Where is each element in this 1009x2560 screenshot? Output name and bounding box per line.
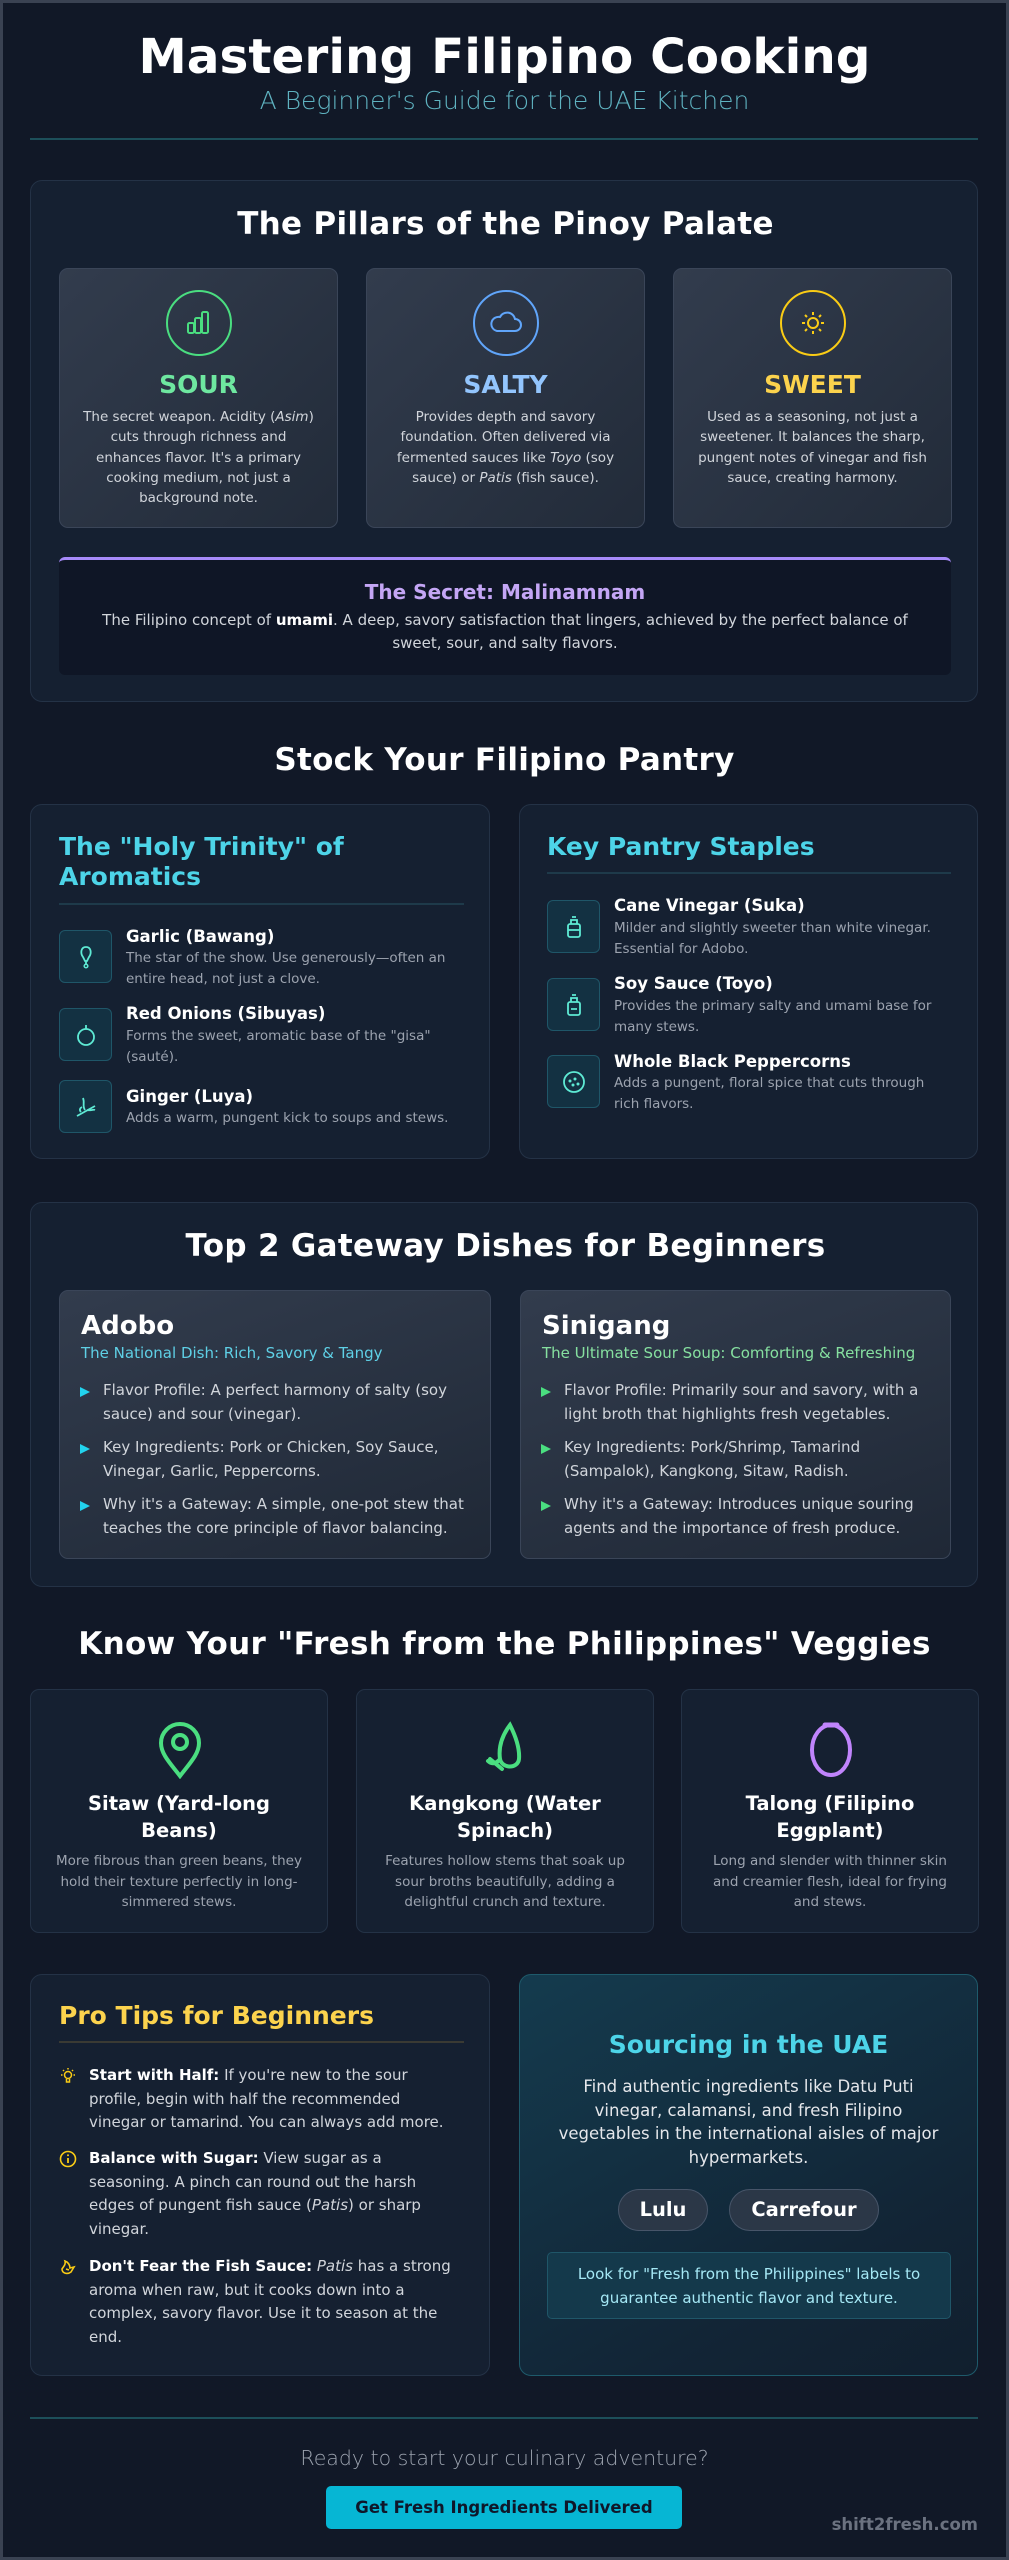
card: sinigang: Why it's a Gateway: Introduces unique souring <box>564 1495 914 1513</box>
card: talong: Long and slender with thinner skin <box>713 1853 947 1869</box>
card: kangkong <box>356 1689 654 1933</box>
item: onion: Forms the sweet, aromatic base of the "gisa" <box>126 1028 431 1044</box>
card: sour: cooking medium, not just a <box>106 470 291 486</box>
pill: carrefour <box>729 2189 879 2231</box>
heading: pantry: Stock Your Filipino Pantry <box>274 742 735 778</box>
card: salty <box>366 268 645 528</box>
card: sour: The secret weapon. Acidity (Asim) <box>83 409 314 425</box>
tip: balance with sugar <box>60 2149 421 2238</box>
card: adobo: sauce) and sour (vinegar). <box>103 1404 301 1422</box>
card: sinigang: agents and the importance of fresh produce. <box>564 1518 900 1536</box>
panel: aromatics <box>30 804 490 1159</box>
card: adobo: Key Ingredients: Pork or Chicken, Soy Sauce, <box>103 1438 438 1456</box>
callout: label note <box>547 2252 951 2319</box>
card: talong: Talong (Filipino <box>746 1792 914 1815</box>
tip: fish sauce: end. <box>89 2328 122 2346</box>
item: vinegar: Cane Vinegar (Suka) <box>614 896 805 915</box>
icon: leaf <box>486 1721 522 1772</box>
pill: lulu <box>618 2189 708 2231</box>
card: sour: enhances flavor. It's a primary <box>96 450 301 466</box>
tip: start with half: profile, begin with half the recommended <box>89 2090 400 2108</box>
card: kangkong: delightful crunch and texture. <box>404 1894 606 1910</box>
card: adobo: Why it's a Gateway: A simple, one-pot stew that <box>103 1495 464 1513</box>
callout: label note: guarantee authentic flavor and texture. <box>600 2289 898 2307</box>
card: sweet: sauce, creating harmony. <box>727 470 898 486</box>
card: sweet: Used as a seasoning, not just a <box>707 409 918 425</box>
item: soy sauce: Provides the primary salty and umami base for <box>614 998 931 1014</box>
item: ginger: Ginger (Luya) <box>126 1087 253 1106</box>
card: sitaw: Beans) <box>141 1819 217 1842</box>
callout: malinamnam: The Secret: Malinamnam <box>365 580 645 604</box>
panel: dishes <box>30 1202 978 1587</box>
card: sitaw: simmered stews. <box>122 1894 236 1910</box>
heading: pro tips: Pro Tips for Beginners <box>59 2001 374 2030</box>
tip: balance with sugar: seasoning. A pinch can round out the harsh <box>89 2173 416 2191</box>
card: sitaw: More fibrous than green beans, they <box>56 1853 302 1869</box>
item: garlic: entire head, not just a clove. <box>126 970 320 986</box>
card: talong: Eggplant) <box>776 1819 884 1842</box>
card: sitaw: Sitaw (Yard-long <box>88 1792 270 1815</box>
item: peppercorns: rich flavors. <box>614 1096 693 1112</box>
heading: holy trinity: Aromatics <box>59 862 201 891</box>
card: talong: and stews. <box>794 1894 866 1910</box>
callout: label note: Look for "Fresh from the Philippines" labels to <box>578 2265 920 2283</box>
panel: staples <box>519 804 978 1159</box>
card: sweet <box>673 268 952 528</box>
tip: start with half: vinegar or tamarind. You can always add more. <box>89 2113 444 2131</box>
card: sinigang: Sinigang <box>542 1311 670 1341</box>
tip: fish sauce: complex, savory flavor. Use it to season at the <box>89 2304 437 2322</box>
card: talong <box>681 1689 979 1933</box>
tip: fish sauce <box>61 2257 451 2346</box>
icon: eggplant <box>810 1722 852 1777</box>
card: kangkong: Kangkong (Water <box>409 1792 601 1815</box>
text: sourcing description: vinegar, calamansi, and fresh Filipino <box>595 2100 902 2120</box>
panel: pillars <box>30 180 978 702</box>
item: peppercorns <box>547 1052 924 1112</box>
card: sinigang: light broth that highlights fresh vegetables. <box>564 1404 890 1422</box>
card: adobo: teaches the core principle of flavor balancing. <box>103 1518 448 1536</box>
item: ginger: Adds a warm, pungent kick to soups and stews. <box>126 1110 448 1126</box>
item: garlic <box>59 927 445 986</box>
card: adobo: Adobo <box>81 1311 174 1341</box>
button: get fresh ingredients: Get Fresh Ingredients Delivered <box>355 2498 653 2517</box>
text: sourcing description: Find authentic ingredients like Datu Puti <box>583 2077 914 2096</box>
text: sourcing description: hypermarkets. <box>689 2148 808 2166</box>
card: sitaw <box>30 1689 328 1933</box>
item: vinegar: Milder and slightly sweeter than white vinegar. <box>614 920 931 936</box>
card: sinigang: (Sampalok), Kangkong, Sitaw, Radish. <box>564 1462 849 1480</box>
heading: veggies: Know Your "Fresh from the Philippines" Veggies <box>78 1626 931 1662</box>
card: sweet: SWEET <box>764 370 861 399</box>
icon: sun <box>780 290 846 356</box>
card: sinigang: The Ultimate Sour Soup: Comforting & Refreshing <box>542 1344 915 1362</box>
card: salty: sauce) or Patis (fish sauce). <box>412 470 599 486</box>
card: salty: SALTY <box>463 370 548 399</box>
subtitle: A Beginner's Guide for the UAE Kitchen <box>260 86 749 115</box>
title: Mastering Filipino Cooking <box>138 29 871 85</box>
text: sourcing description: vegetables in the international aisles of major <box>559 2124 938 2143</box>
pill: lulu: Lulu <box>640 2198 686 2221</box>
tip: balance with sugar: vinegar. <box>89 2220 149 2238</box>
card: salty: foundation. Often delivered via <box>400 429 611 445</box>
icon: chart <box>166 290 232 356</box>
heading: staples: Key Pantry Staples <box>547 832 815 861</box>
tip: fish sauce: aroma when raw, but it cooks down into a <box>89 2281 405 2299</box>
card: salty: fermented sauces like Toyo (soy <box>397 450 614 466</box>
text: sourcing description <box>559 2077 938 2166</box>
tip: start with half <box>61 2066 444 2131</box>
icon: cloud <box>473 290 539 356</box>
item: vinegar <box>547 896 931 956</box>
card: sour: SOUR <box>159 370 238 399</box>
card: sour: background note. <box>139 490 258 506</box>
card: sinigang: Flavor Profile: Primarily sour and savory, with a <box>564 1381 918 1399</box>
pill: carrefour: Carrefour <box>751 2198 857 2221</box>
tip: start with half: Start with Half: If you're new to the sour <box>89 2066 408 2084</box>
text: call to action: Ready to start your culinary adventure? <box>300 2446 709 2470</box>
callout: malinamnam: The Filipino concept of umami. A deep, savory satisfaction that lingers, achieved by the perfect balance of <box>102 611 908 629</box>
heading: pillars: The Pillars of the Pinoy Palate <box>237 206 774 242</box>
item: peppercorns: Whole Black Peppercorns <box>614 1052 851 1071</box>
card: sweet: sweetener. It balances the sharp, <box>700 429 925 445</box>
panel: pro tips <box>30 1974 490 2376</box>
card: kangkong: Spinach) <box>457 1819 553 1842</box>
card: sinigang <box>520 1290 951 1559</box>
item: vinegar: Essential for Adobo. <box>614 940 748 956</box>
tip: fish sauce: Don't Fear the Fish Sauce: Patis has a strong <box>89 2257 451 2275</box>
card: sweet: pungent notes of vinegar and fish <box>698 450 927 466</box>
button: get fresh ingredients <box>326 2486 682 2529</box>
heading: dishes: Top 2 Gateway Dishes for Beginners <box>185 1228 826 1264</box>
item: garlic: The star of the show. Use generously—often an <box>126 950 445 966</box>
card: adobo: The National Dish: Rich, Savory & Tangy <box>81 1344 383 1362</box>
card: salty: Provides depth and savory <box>416 409 595 425</box>
item: onion: (sauté). <box>126 1048 178 1064</box>
card: kangkong: Features hollow stems that soak up <box>385 1853 625 1869</box>
card: sour: cuts through richness and <box>111 429 286 445</box>
panel: sourcing <box>519 1974 978 2376</box>
tip: balance with sugar: edges of pungent fish sauce (Patis) or sharp <box>89 2196 421 2214</box>
card: adobo: Flavor Profile: A perfect harmony of salty (soy <box>103 1381 447 1399</box>
text: website: shift2fresh.com <box>832 2515 978 2534</box>
item: peppercorns: Adds a pungent, floral spice that cuts through <box>614 1075 924 1091</box>
card: adobo: Vinegar, Garlic, Peppercorns. <box>103 1462 321 1480</box>
item: ginger <box>59 1080 448 1133</box>
card: sinigang: Key Ingredients: Pork/Shrimp, Tamarind <box>564 1438 860 1456</box>
tip: balance with sugar: Balance with Sugar: View sugar as a <box>89 2149 382 2167</box>
icon: pin <box>159 1722 201 1779</box>
item: soy sauce <box>547 974 932 1034</box>
card: sour <box>59 268 338 528</box>
card: talong: and creamier flesh, ideal for frying <box>713 1874 947 1890</box>
item: soy sauce: many stews. <box>614 1018 699 1034</box>
callout: malinamnam <box>59 557 951 675</box>
item: onion: Red Onions (Sibuyas) <box>126 1004 325 1023</box>
heading: holy trinity: The "Holy Trinity" of <box>59 832 344 861</box>
card: sitaw: hold their texture perfectly in long- <box>60 1874 298 1890</box>
heading: holy trinity <box>59 832 344 891</box>
item: garlic: Garlic (Bawang) <box>126 927 274 946</box>
callout: malinamnam: sweet, sour, and salty flavors. <box>392 634 618 652</box>
card: adobo <box>59 1290 491 1559</box>
item: soy sauce: Soy Sauce (Toyo) <box>614 974 773 993</box>
card: kangkong: sour broths beautifully, adding a <box>395 1874 615 1890</box>
item: onion <box>59 1004 431 1064</box>
heading: sourcing: Sourcing in the UAE <box>609 2030 888 2059</box>
